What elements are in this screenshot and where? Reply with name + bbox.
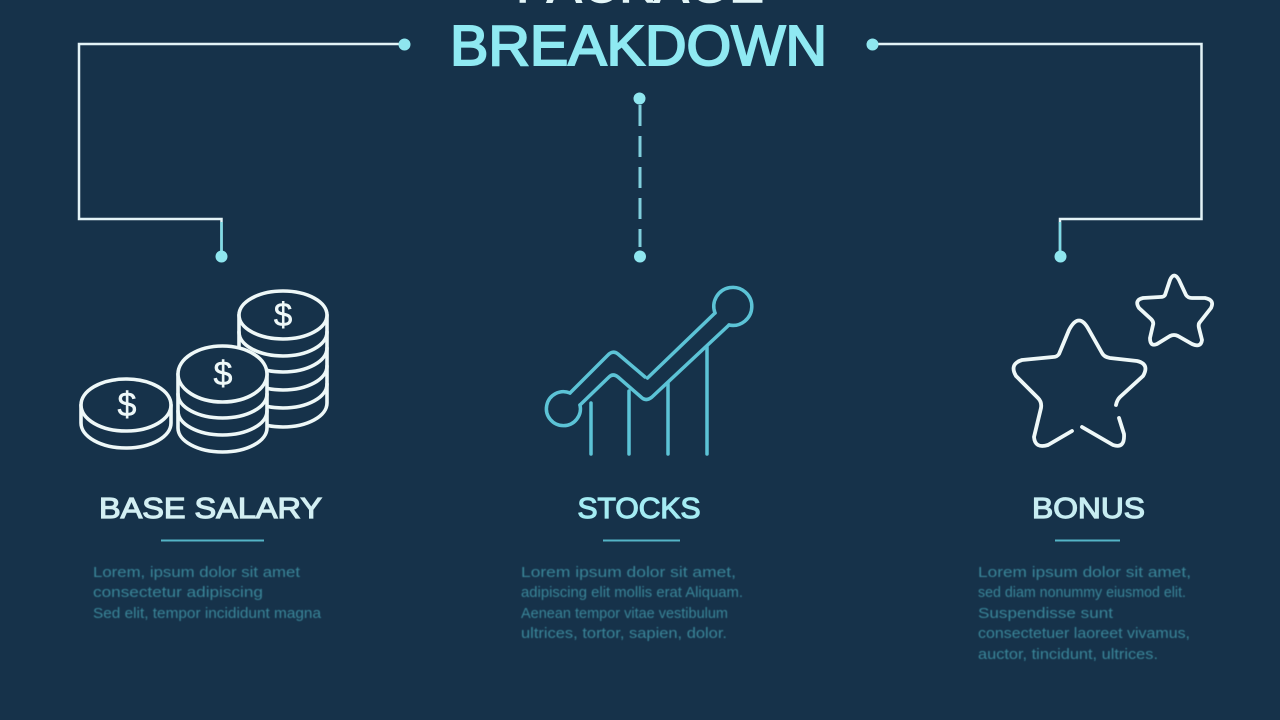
- text: stocks description: adipiscing elit mollis erat Aliquam.: [521, 585, 743, 601]
- panel: base salary: [93, 493, 322, 622]
- right coin stack: $: [274, 296, 292, 333]
- title: BREAKDOWN: [450, 14, 827, 78]
- panel: bonus: [978, 493, 1191, 663]
- underline: stocks: [603, 540, 680, 542]
- text: bonus description: consectetuer laoreet vivamus,: [978, 626, 1190, 642]
- heading: stocks: STOCKS: [578, 493, 700, 525]
- middle coin stack: $: [214, 355, 233, 393]
- middle coin stack: [178, 346, 267, 452]
- text: bonus description: [978, 565, 1191, 663]
- large star: [1014, 320, 1145, 446]
- text: base salary description: consectetur adipiscing: [93, 585, 263, 601]
- small star: [1137, 276, 1212, 345]
- connector: title to bonus: [866, 38, 1202, 262]
- text: bonus description: Lorem ipsum dolor sit amet,: [978, 565, 1191, 581]
- text: stocks description: [521, 565, 743, 642]
- right coin stack: [239, 291, 327, 427]
- heading: base salary: BASE SALARY: [99, 493, 322, 525]
- text: stocks description: Aenean tempor vitae vestibulum: [521, 606, 728, 622]
- icon: stock growth chart: [546, 287, 752, 454]
- underline: base salary: [161, 540, 264, 542]
- single coin: [81, 379, 171, 448]
- single coin: $: [118, 386, 137, 424]
- text: base salary description: [93, 565, 322, 622]
- text: stocks description: ultrices, tortor, sapien, dolor.: [521, 626, 727, 642]
- icon: coin stacks: [81, 291, 327, 452]
- connector: title to stocks: [634, 92, 646, 262]
- connector: title to base salary: [79, 38, 410, 262]
- underline: bonus: [1055, 540, 1120, 542]
- heading: bonus: BONUS: [1032, 493, 1145, 525]
- text: bonus description: auctor, tincidunt, ultrices.: [978, 647, 1158, 663]
- text: base salary description: Lorem, ipsum dolor sit amet: [93, 565, 300, 581]
- text: stocks description: Lorem ipsum dolor sit amet,: [521, 565, 736, 581]
- panel: stocks: [521, 493, 743, 642]
- icon: two stars: [1014, 276, 1212, 446]
- text: bonus description: Suspendisse sunt: [978, 606, 1113, 622]
- text: base salary description: Sed elit, tempor incididunt magna: [93, 606, 322, 622]
- text: bonus description: sed diam nonummy eiusmod elit.: [978, 585, 1186, 601]
